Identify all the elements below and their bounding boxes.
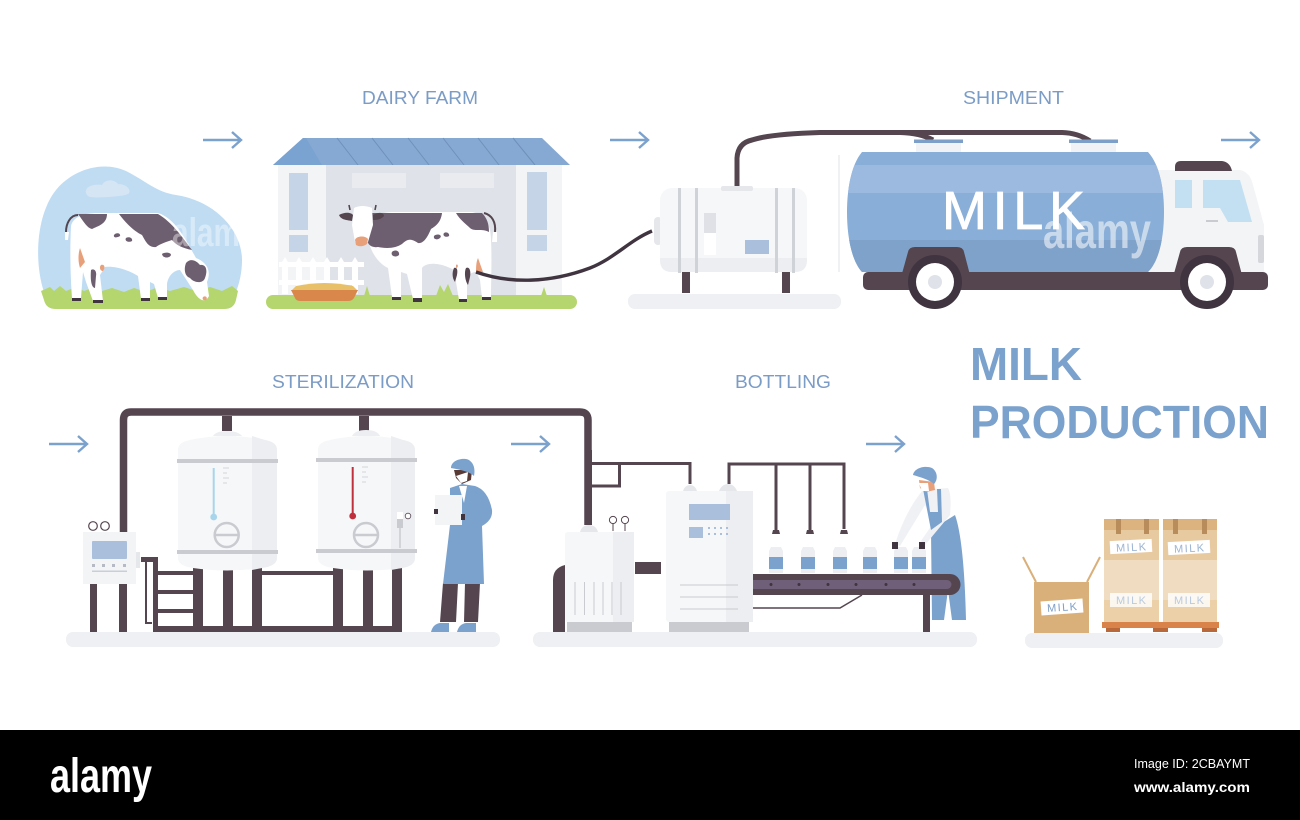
panel: sterilization [66,412,588,647]
lid tops [914,140,1118,143]
control panel legs [90,584,127,632]
nozzle [654,217,662,245]
arrow 2 [610,132,648,148]
nozzles [772,530,848,534]
labels: MILK [1174,595,1205,607]
cow patches [367,213,489,256]
arrow 1 [203,132,241,148]
worker overalls [892,467,966,620]
curved pipe [553,565,565,632]
cow horns [349,205,376,210]
pallet stack [1102,519,1219,632]
windshield [1203,180,1252,222]
grass tufts [364,284,547,296]
labels: MILK [1116,541,1147,555]
title [970,338,1269,448]
ground [1025,633,1223,648]
legs [440,583,480,622]
wheel arch rear [898,247,974,290]
cow head [352,206,373,244]
tank frames [141,557,402,632]
lids [916,143,1116,152]
black footer bar [0,730,1300,820]
face [454,470,472,484]
cab [1150,170,1264,272]
cow ears [339,213,384,221]
tanker body [847,152,1164,272]
tank bands [678,188,795,273]
trough bowl [291,290,358,301]
thermometer hot [349,467,368,519]
face [919,480,935,492]
pallet feet [1106,628,1217,632]
cap [451,459,475,476]
legs [931,515,966,620]
box label: MILK [1047,601,1078,615]
cow tail [66,215,78,232]
ground [628,294,841,309]
tail tip [492,232,497,242]
gauges [609,516,629,531]
cab windows [1175,180,1192,208]
valve wheel [215,523,239,547]
torso and arms [895,488,951,546]
cab bumper [1258,235,1264,263]
cap [913,467,937,484]
cow body [367,212,491,300]
arrow 6 [866,436,904,452]
hose to storage tank [476,231,652,280]
control panel [83,522,140,584]
tank blue panel [745,240,769,254]
pipework [592,463,690,486]
filling machine [666,484,753,632]
coat [443,484,492,584]
roof [273,138,570,165]
side tube [146,562,152,623]
tank 2 [316,430,417,570]
cow udder [456,258,483,274]
roof ribs [337,138,535,165]
tank white label [704,233,716,255]
title: PRODUCTION [970,396,1269,448]
thermometer cold [210,468,229,520]
heading: shipment: SHIPMENT [963,87,1064,108]
gloves [892,542,925,549]
tank gauge block [704,213,716,233]
center wall [326,165,516,295]
image id: Image ID: 2CBAYMT [1134,756,1250,771]
heading: dairy farm: DAIRY FARM [362,87,478,108]
milking cups [453,268,470,285]
spoiler [1175,161,1232,171]
cow nose [355,236,368,246]
open box [1023,557,1100,633]
MILK lettering: MILK [942,181,1085,241]
tank body [660,188,807,272]
ground [533,632,977,647]
bib [923,489,942,530]
arrow 5 [511,436,549,452]
mask [456,472,468,483]
website: www.alamy.com [1133,779,1250,795]
chassis [863,272,1268,290]
arrow 3 [1221,132,1259,148]
ladder [838,155,840,272]
cow tail [484,213,495,232]
arrow 4 [49,436,87,452]
heading: bottling: BOTTLING [735,371,831,392]
wall signs [352,173,494,188]
tape [1116,519,1207,534]
panel: storage tank [628,186,841,309]
panel: barn [266,138,577,309]
riser pipe [585,450,592,525]
bottles [769,547,926,573]
alamy logo: alamy [50,750,152,803]
title: MILK [970,338,1082,390]
panel: bottling [533,450,977,647]
filler pipes [729,464,844,530]
labels: MILK [1116,595,1147,607]
shoes [431,623,476,632]
cow body [70,213,209,301]
worker with clipboard [431,459,492,632]
transfer pipe [737,132,1090,186]
pallet [1102,622,1219,628]
shirt [459,486,467,503]
fence [279,257,364,294]
tank shade [660,258,807,272]
watermark on cow: alam [172,211,240,255]
valve wheel [354,523,378,547]
mask [919,483,929,491]
roof shade [273,138,322,165]
side gauge [397,512,411,548]
sky blob [38,166,242,300]
main pipework [124,412,588,532]
cow udder [78,248,207,300]
hands [434,509,465,520]
wheel front [1180,255,1234,309]
tank legs [682,272,790,293]
cow hooves [72,297,167,303]
cloud [86,180,129,197]
panel: grazing cow in pasture [38,166,242,309]
ground [66,632,500,647]
labels: MILK [1174,542,1205,556]
clipboard [435,495,462,525]
door handle [1206,220,1218,222]
wheel arch front [1170,247,1246,290]
heading: sterilization: STERILIZATION [272,371,414,392]
hooves [392,297,491,302]
connector [635,562,661,574]
panel: packaged boxes [1023,519,1223,648]
heater unit [565,516,634,632]
labels [1110,539,1210,607]
tank 1 [177,431,278,570]
conveyor [753,574,960,632]
feeding trough [291,283,358,291]
walls [278,165,562,295]
cow patches [78,214,206,288]
panel: milk truck [839,140,1268,309]
grass strip [266,295,577,309]
watermark: alamy [1043,203,1151,259]
windows [289,172,547,252]
tank cap [721,186,753,191]
tail tip [65,232,69,240]
pipe stubs [222,416,369,431]
wheel rear [908,255,962,309]
grass [41,286,238,309]
